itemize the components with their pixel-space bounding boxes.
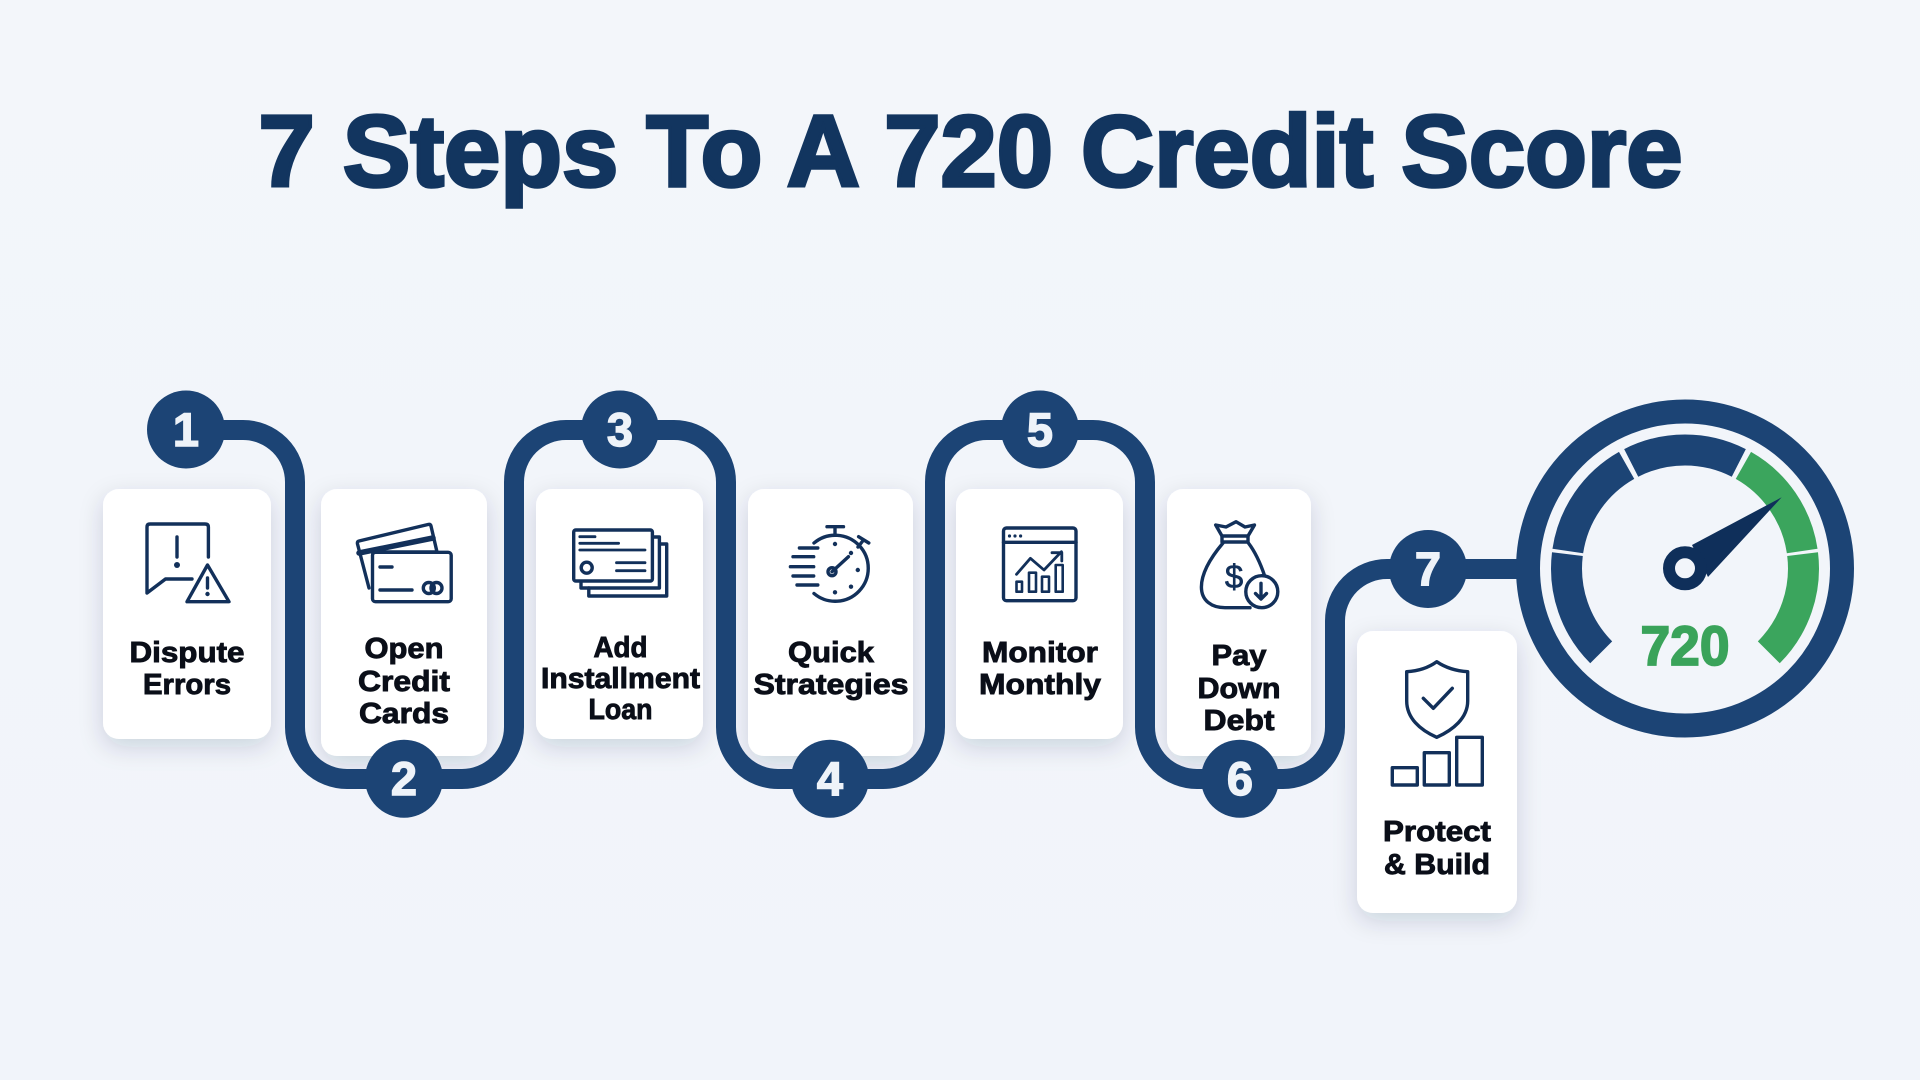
icon: speech bubble with warning	[147, 524, 229, 602]
connector path	[186, 430, 1525, 779]
label: Pay Down Debt	[1198, 640, 1280, 737]
label: Pay Down Debt: Debt	[1204, 705, 1275, 737]
icon: credit cards	[357, 524, 451, 602]
card 1: Dispute Errors	[103, 489, 271, 739]
step badge 6	[1201, 740, 1279, 818]
step badge 1	[147, 390, 225, 468]
label: Dispute Errors	[130, 637, 244, 701]
gauge segments	[1567, 450, 1803, 652]
icon: money bag	[1201, 522, 1278, 608]
label: Protect & Build	[1383, 816, 1491, 881]
step badge 5	[1001, 390, 1079, 468]
card 6: Pay Down Debt	[1167, 489, 1311, 756]
card 5: Monitor Monthly	[956, 489, 1123, 739]
title: 7 Steps To A 720 Credit Score	[258, 96, 1682, 208]
card 4: Quick Strategies	[748, 489, 913, 756]
label: Monitor Monthly	[979, 637, 1101, 701]
step badge 6: 6	[1227, 752, 1253, 805]
step badge 4	[791, 740, 869, 818]
icon: chart window	[1004, 528, 1076, 601]
label: Add Installment Loan: Installment	[541, 663, 700, 695]
icon: stopwatch	[790, 527, 869, 601]
label: Monitor Monthly: Monitor	[982, 637, 1098, 669]
label: Monitor Monthly: Monthly	[979, 669, 1101, 701]
card 2: Open Credit Cards	[321, 489, 487, 756]
label: Dispute Errors: Dispute	[130, 637, 244, 669]
label: Pay Down Debt: Pay	[1212, 640, 1266, 672]
gauge score value: 720	[1640, 614, 1730, 677]
label: Open Credit Cards: Open	[364, 633, 444, 665]
label: Add Installment Loan	[541, 632, 700, 726]
card 7: Protect and Build	[1357, 631, 1517, 913]
label: Quick Strategies: Quick	[788, 637, 875, 669]
label: Quick Strategies	[754, 637, 908, 701]
step badge 2: 2	[391, 752, 417, 805]
label: Open Credit Cards	[358, 633, 450, 730]
label: Add Installment Loan: Loan	[588, 694, 652, 726]
step badge 7: 7	[1415, 542, 1441, 596]
label: Quick Strategies: Strategies	[754, 669, 908, 701]
label: Pay Down Debt: Down	[1198, 673, 1280, 705]
step badge 7	[1389, 530, 1467, 608]
icon: loan documents	[574, 530, 667, 596]
label: Protect & Build: Protect	[1383, 816, 1491, 848]
step badge 1: 1	[173, 403, 199, 456]
label: Open Credit Cards: Credit	[358, 666, 450, 698]
label: Protect & Build: & Build	[1384, 849, 1490, 881]
step badge 4: 4	[817, 752, 843, 805]
gauge: 720 credit score	[1528, 412, 1842, 726]
icon: shield with bars	[1392, 662, 1482, 785]
card 3: Add Installment Loan	[536, 489, 703, 739]
label: Add Installment Loan: Add	[594, 632, 648, 664]
gauge needle	[1669, 497, 1782, 584]
step badge 3	[581, 390, 659, 468]
label: Dispute Errors: Errors	[143, 669, 231, 701]
label: Open Credit Cards: Cards	[359, 698, 449, 730]
step badge 2	[365, 740, 443, 818]
icon: money bag: $	[1225, 558, 1243, 595]
step badge 5: 5	[1027, 403, 1053, 456]
step badge 3: 3	[607, 403, 633, 456]
